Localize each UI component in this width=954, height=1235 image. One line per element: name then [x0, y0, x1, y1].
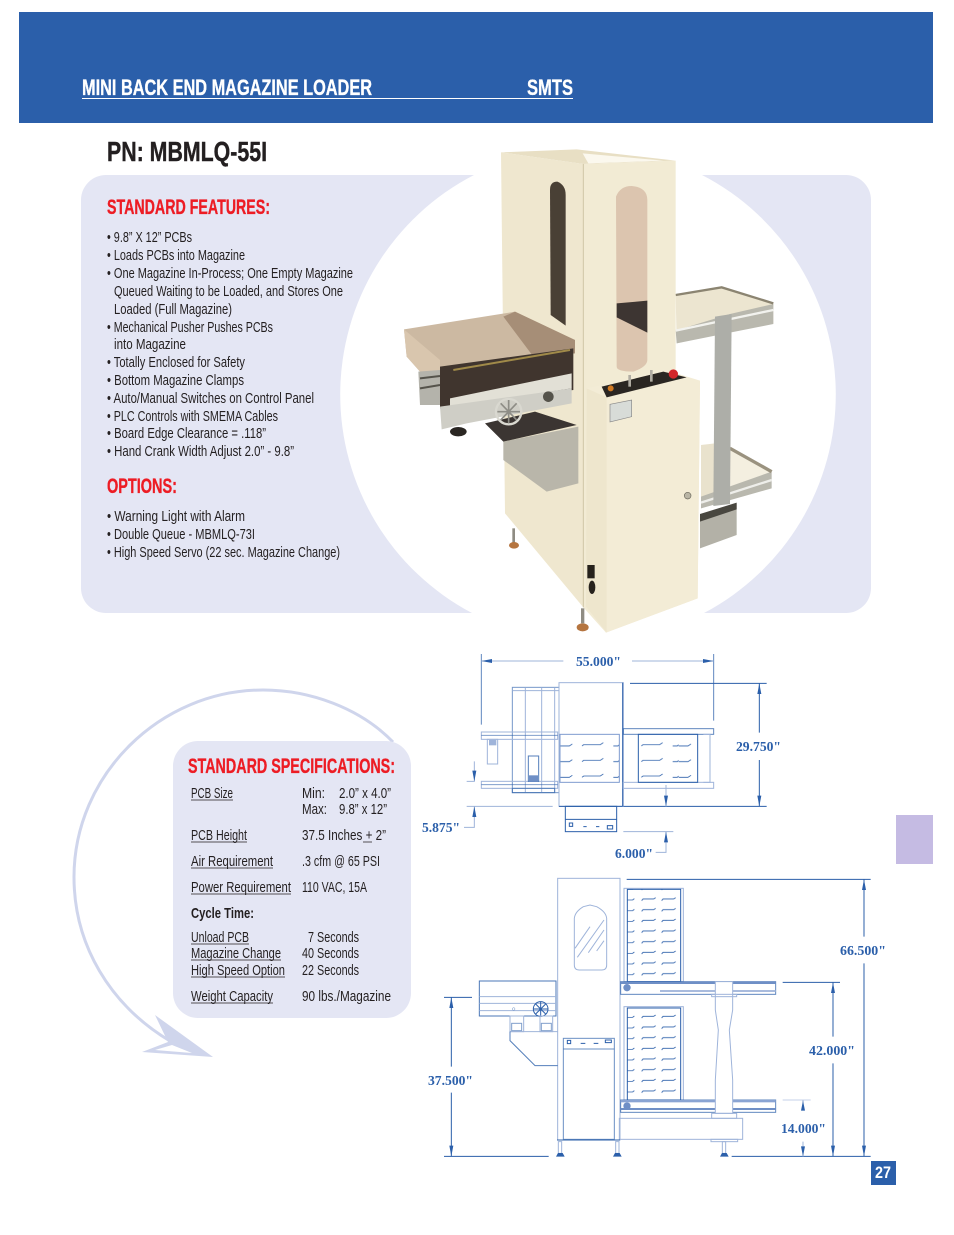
heading: standard specifications: STANDARD SPECIFICATIONS:: [188, 755, 395, 778]
spec values: 40 Seconds: [302, 945, 359, 962]
metal hopper: [503, 427, 578, 492]
left window: [550, 182, 566, 326]
machine photo illustration: [404, 149, 773, 633]
heading: options: OPTIONS:: [107, 475, 177, 498]
front foot: [577, 608, 589, 631]
dimension labels: top view: 6.000": [615, 846, 653, 861]
spec values: Max:: [302, 801, 327, 818]
dimension labels: top view: 29.750": [736, 739, 781, 754]
features list: • PLC Controls with SMEMA Cables: [107, 408, 278, 425]
rear feet: [509, 528, 519, 549]
header category: SMTS: [527, 75, 573, 100]
support column: [713, 314, 732, 506]
spec labels: Cycle Time:: [191, 905, 254, 922]
features list: into Magazine: [114, 336, 186, 353]
section tab: [896, 815, 933, 864]
panel: standard specifications: [173, 741, 411, 1018]
spec labels: Weight Capacity: [191, 988, 273, 1005]
spec values: 90 lbs./Magazine: [302, 988, 391, 1005]
power switch: [587, 565, 595, 594]
dimension labels: side view: 42.000": [809, 1043, 855, 1058]
features list: • Totally Enclosed for Safety: [107, 354, 245, 371]
dimension lines: top view: [464, 654, 767, 852]
top view technical drawing: [464, 654, 767, 852]
features list: Loaded (Full Magazine): [114, 301, 232, 318]
header title: MINI BACK END MAGAZINE LOADER: [82, 75, 372, 100]
spec labels: Air Requirement: [191, 853, 274, 870]
spec labels: PCB Height: [191, 827, 248, 844]
heading: standard features: STANDARD FEATURES:: [107, 196, 270, 219]
options list: • Warning Light with Alarm: [107, 508, 245, 525]
hand wheel: [496, 399, 521, 424]
spec labels: [191, 785, 372, 1005]
spec labels: Unload PCB: [191, 929, 249, 946]
header band: [19, 12, 933, 123]
dimension labels: side view: [428, 943, 886, 1136]
spec values: 7 Seconds: [308, 929, 359, 946]
curved arrow: [74, 690, 393, 1057]
side view body: [479, 878, 776, 1157]
dimension labels: side view: 66.500": [840, 943, 886, 958]
page number: 27: [875, 1163, 891, 1182]
part number heading: PN: MBMLQ-55I: [107, 136, 267, 167]
tray mechanism: [418, 348, 577, 442]
right window: [616, 186, 647, 372]
spec labels: Power Requirement: [191, 879, 292, 896]
panel: standard features text: [107, 196, 353, 561]
right upper tray: [676, 287, 773, 343]
side view technical drawing: [444, 878, 871, 1157]
right lower tray: [700, 443, 772, 548]
features list: • Loads PCBs into Magazine: [107, 247, 245, 264]
options list: • High Speed Servo (22 sec. Magazine Change): [107, 544, 340, 561]
dimension labels: top view: 5.875": [422, 820, 460, 835]
features list: • Hand Crank Width Adjust 2.0” - 9.8”: [107, 443, 294, 460]
door lock: [684, 492, 691, 499]
spec values: 37.5 Inches + 2”: [302, 827, 386, 844]
options list: • Double Queue - MBMLQ-73I: [107, 526, 255, 543]
tower edge: [582, 164, 585, 607]
spec values: 22 Seconds: [302, 962, 359, 979]
spec labels: PCB Size: [191, 785, 233, 802]
tower front: [583, 161, 700, 633]
dimension labels: side view: 37.500": [428, 1073, 473, 1088]
control panel: [602, 369, 687, 422]
features list: Queued Waiting to be Loaded, and Stores One: [114, 283, 343, 300]
page number: [871, 1161, 896, 1185]
spec values: .3 cfm @ 65 PSI: [302, 853, 380, 870]
spec labels: Magazine Change: [191, 945, 281, 962]
features list: • Bottom Magazine Clamps: [107, 372, 244, 389]
dimension labels: top view: 55.000": [576, 654, 621, 669]
features list: • 9.8” X 12” PCBs: [107, 229, 192, 246]
tower left side: [501, 152, 583, 607]
panel: features background: [81, 175, 871, 613]
top view body: [481, 683, 714, 832]
dimension labels: side view: 14.000": [781, 1121, 826, 1136]
features list: [107, 229, 353, 460]
features list: • Auto/Manual Switches on Control Panel: [107, 390, 314, 407]
dimension lines: side view: [444, 879, 871, 1156]
features list: • One Magazine In-Process; One Empty Magazine: [107, 265, 353, 282]
features list: • Mechanical Pusher Pushes PCBs: [107, 319, 273, 336]
spec labels: High Speed Option: [191, 962, 285, 979]
dimension labels: top view: [422, 654, 781, 861]
spec values: Min:: [302, 785, 325, 802]
smoked tray cover: [404, 312, 575, 380]
spec values: [302, 785, 391, 1005]
door cabinet: [586, 369, 700, 633]
spec values: 2.0” x 4.0”: [339, 785, 391, 802]
options list: [107, 508, 340, 561]
features list: • Board Edge Clearance = .118”: [107, 425, 266, 442]
tower top opening: [501, 149, 676, 164]
spec values: 9.8” x 12”: [339, 801, 387, 818]
spec values: 110 VAC, 15A: [302, 879, 367, 896]
